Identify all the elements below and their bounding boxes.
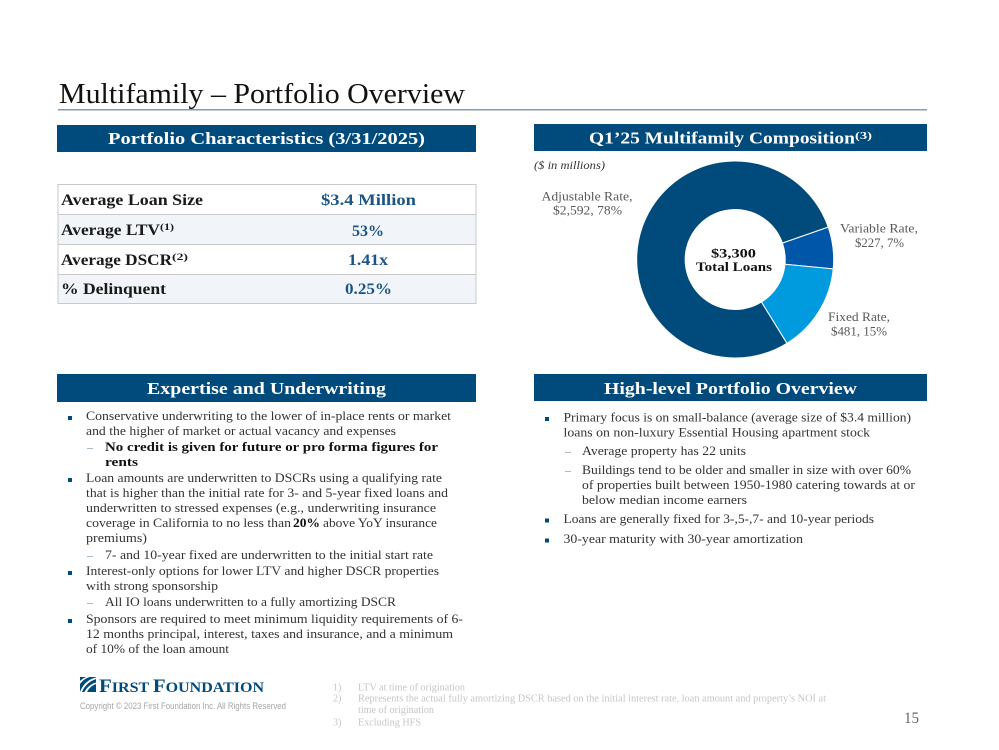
table: portfolio metrics xyxy=(58,184,476,304)
bullet list: underwriting: – xyxy=(86,440,94,454)
heading: high-level portfolio overview xyxy=(534,374,927,401)
table: portfolio metrics: (2) xyxy=(172,252,188,263)
label: variable rate xyxy=(840,222,918,250)
bullet list: underwriting: All IO loans underwritten to a fully amortizing DSCR xyxy=(105,595,397,609)
bullet list: overview: Average property has 22 units xyxy=(582,444,746,458)
table: portfolio metrics: 1.41x xyxy=(348,252,388,269)
page number: 15 xyxy=(904,710,919,727)
logo: First Foundation: FIRST FOUNDATION xyxy=(99,676,265,697)
panel: multifamily composition xyxy=(534,124,927,358)
bullet list: underwriting xyxy=(68,409,463,656)
bullet list: overview: – xyxy=(564,444,572,458)
bullet list: underwriting: 20% xyxy=(293,516,320,530)
footnotes xyxy=(333,682,826,728)
bullet list: overview: – xyxy=(564,463,572,477)
heading: high-level portfolio overview: High-level Portfolio Overview xyxy=(604,379,858,398)
panel: expertise and underwriting xyxy=(57,374,476,656)
heading: composition xyxy=(534,124,927,151)
bullet list: underwriting: underwritten to stressed expenses (e.g., underwriting insurance xyxy=(86,501,436,515)
bullet list: overview: Buildings tend to be older and smaller in size with over 60% xyxy=(582,463,912,477)
panel: portfolio characteristics xyxy=(57,125,476,304)
label: adjustable rate: Adjustable Rate, xyxy=(542,190,632,204)
bullet list: underwriting: and the higher of market or actual vacancy and expenses xyxy=(86,424,396,438)
footnotes: 2) xyxy=(333,694,341,704)
bullet list: underwriting: premiums) xyxy=(86,531,147,545)
table: portfolio metrics: Average Loan Size xyxy=(61,192,203,209)
bullet list: overview: loans on non-luxury Essential Housing apartment stock xyxy=(564,426,871,440)
heading: composition: (3) xyxy=(855,130,872,142)
label: fixed rate: Fixed Rate, xyxy=(828,310,890,324)
panel: high-level portfolio overview xyxy=(534,374,927,546)
bullet list: underwriting: Sponsors are required to meet minimum liquidity requirements of 6- xyxy=(86,612,463,626)
table: portfolio metrics: $3.4 Million xyxy=(321,192,416,209)
bullet list: overview: of properties built between 1950-1980 catering towards at or xyxy=(582,478,916,492)
label: variable rate: Variable Rate, xyxy=(840,222,918,236)
heading: portfolio characteristics xyxy=(57,125,476,152)
bullet list: underwriting: 7- and 10-year fixed are underwritten to the initial start rate xyxy=(105,548,433,562)
heading: composition: Q1’25 Multifamily Composition xyxy=(589,128,856,148)
label: variable rate: $227, 7% xyxy=(855,236,905,250)
bullet list: underwriting: No credit is given for future or pro forma figures for xyxy=(105,440,438,454)
donut chart: Total Loans xyxy=(696,260,772,274)
label: adjustable rate xyxy=(542,190,632,218)
donut chart: $3,300 xyxy=(711,246,756,260)
footnotes: 3) xyxy=(333,718,341,728)
bullet list: underwriting: Loan amounts are underwritten to DSCRs using a qualifying rate xyxy=(86,471,442,485)
bullet list: underwriting: that is higher than the initial rate for 3- and 5-year fixed loans and xyxy=(86,486,449,500)
bullet list: underwriting: above YoY insurance xyxy=(323,516,437,530)
bullet list: overview: below median income earners xyxy=(582,493,747,507)
copyright: Copyright © 2023 First Foundation Inc. All Rights Reserved xyxy=(80,701,286,711)
bullet list: underwriting: coverage in California to no less than xyxy=(86,516,292,530)
heading: portfolio characteristics: Portfolio Characteristics (3/31/2025) xyxy=(108,129,425,148)
footnotes: Excluding HFS xyxy=(358,718,421,728)
donut chart xyxy=(637,161,834,358)
label: fixed rate xyxy=(828,310,890,338)
label: adjustable rate: $2,592, 78% xyxy=(553,204,623,218)
bullet list: overview xyxy=(545,410,916,546)
bullet list: overview: Loans are generally fixed for 3-,5-,7- and 10-year periods xyxy=(564,512,874,526)
bullet list: underwriting: with strong sponsorship xyxy=(86,579,218,593)
bullet list: underwriting: of 10% of the loan amount xyxy=(86,642,230,656)
units note: ($ in millions) xyxy=(534,159,605,172)
bullet list: underwriting: 12 months principal, interest, taxes and insurance, and a minimum xyxy=(86,627,453,641)
bullet list: underwriting: – xyxy=(86,548,94,562)
bullet list: overview: Primary focus is on small-balance (average size of $3.4 million) xyxy=(564,410,911,424)
table: portfolio metrics: 53% xyxy=(352,223,384,240)
table: portfolio metrics: % Delinquent xyxy=(61,281,167,298)
footnotes: 1) xyxy=(333,682,341,694)
table: portfolio metrics: 0.25% xyxy=(345,281,392,298)
icon: logo mark xyxy=(80,677,96,692)
bullet list: underwriting: rents xyxy=(105,455,138,469)
title: Multifamily – Portfolio Overview xyxy=(59,78,465,110)
heading: expertise and underwriting: Expertise and Underwriting xyxy=(147,379,387,398)
bullet list: underwriting: Conservative underwriting to the lower of in-place rents or market xyxy=(86,409,452,423)
footnotes: LTV at time of origination xyxy=(358,682,465,694)
bullet list: underwriting: Interest-only options for lower LTV and higher DSCR properties xyxy=(86,564,439,578)
footnotes: Represents the actual fully amortizing DSCR based on the initial interest rate, loan amount and property’s NOI at xyxy=(358,694,826,704)
bullet list: underwriting: – xyxy=(86,595,94,609)
label: fixed rate: $481, 15% xyxy=(831,324,888,338)
table: portfolio metrics: Average LTV xyxy=(61,222,161,239)
footnotes: time of origination xyxy=(358,705,434,716)
bullet list: overview: 30-year maturity with 30-year amortization xyxy=(564,532,804,546)
table: portfolio metrics: Average DSCR xyxy=(61,252,173,269)
table: portfolio metrics: (1) xyxy=(160,222,174,233)
heading: expertise and underwriting xyxy=(57,374,476,402)
